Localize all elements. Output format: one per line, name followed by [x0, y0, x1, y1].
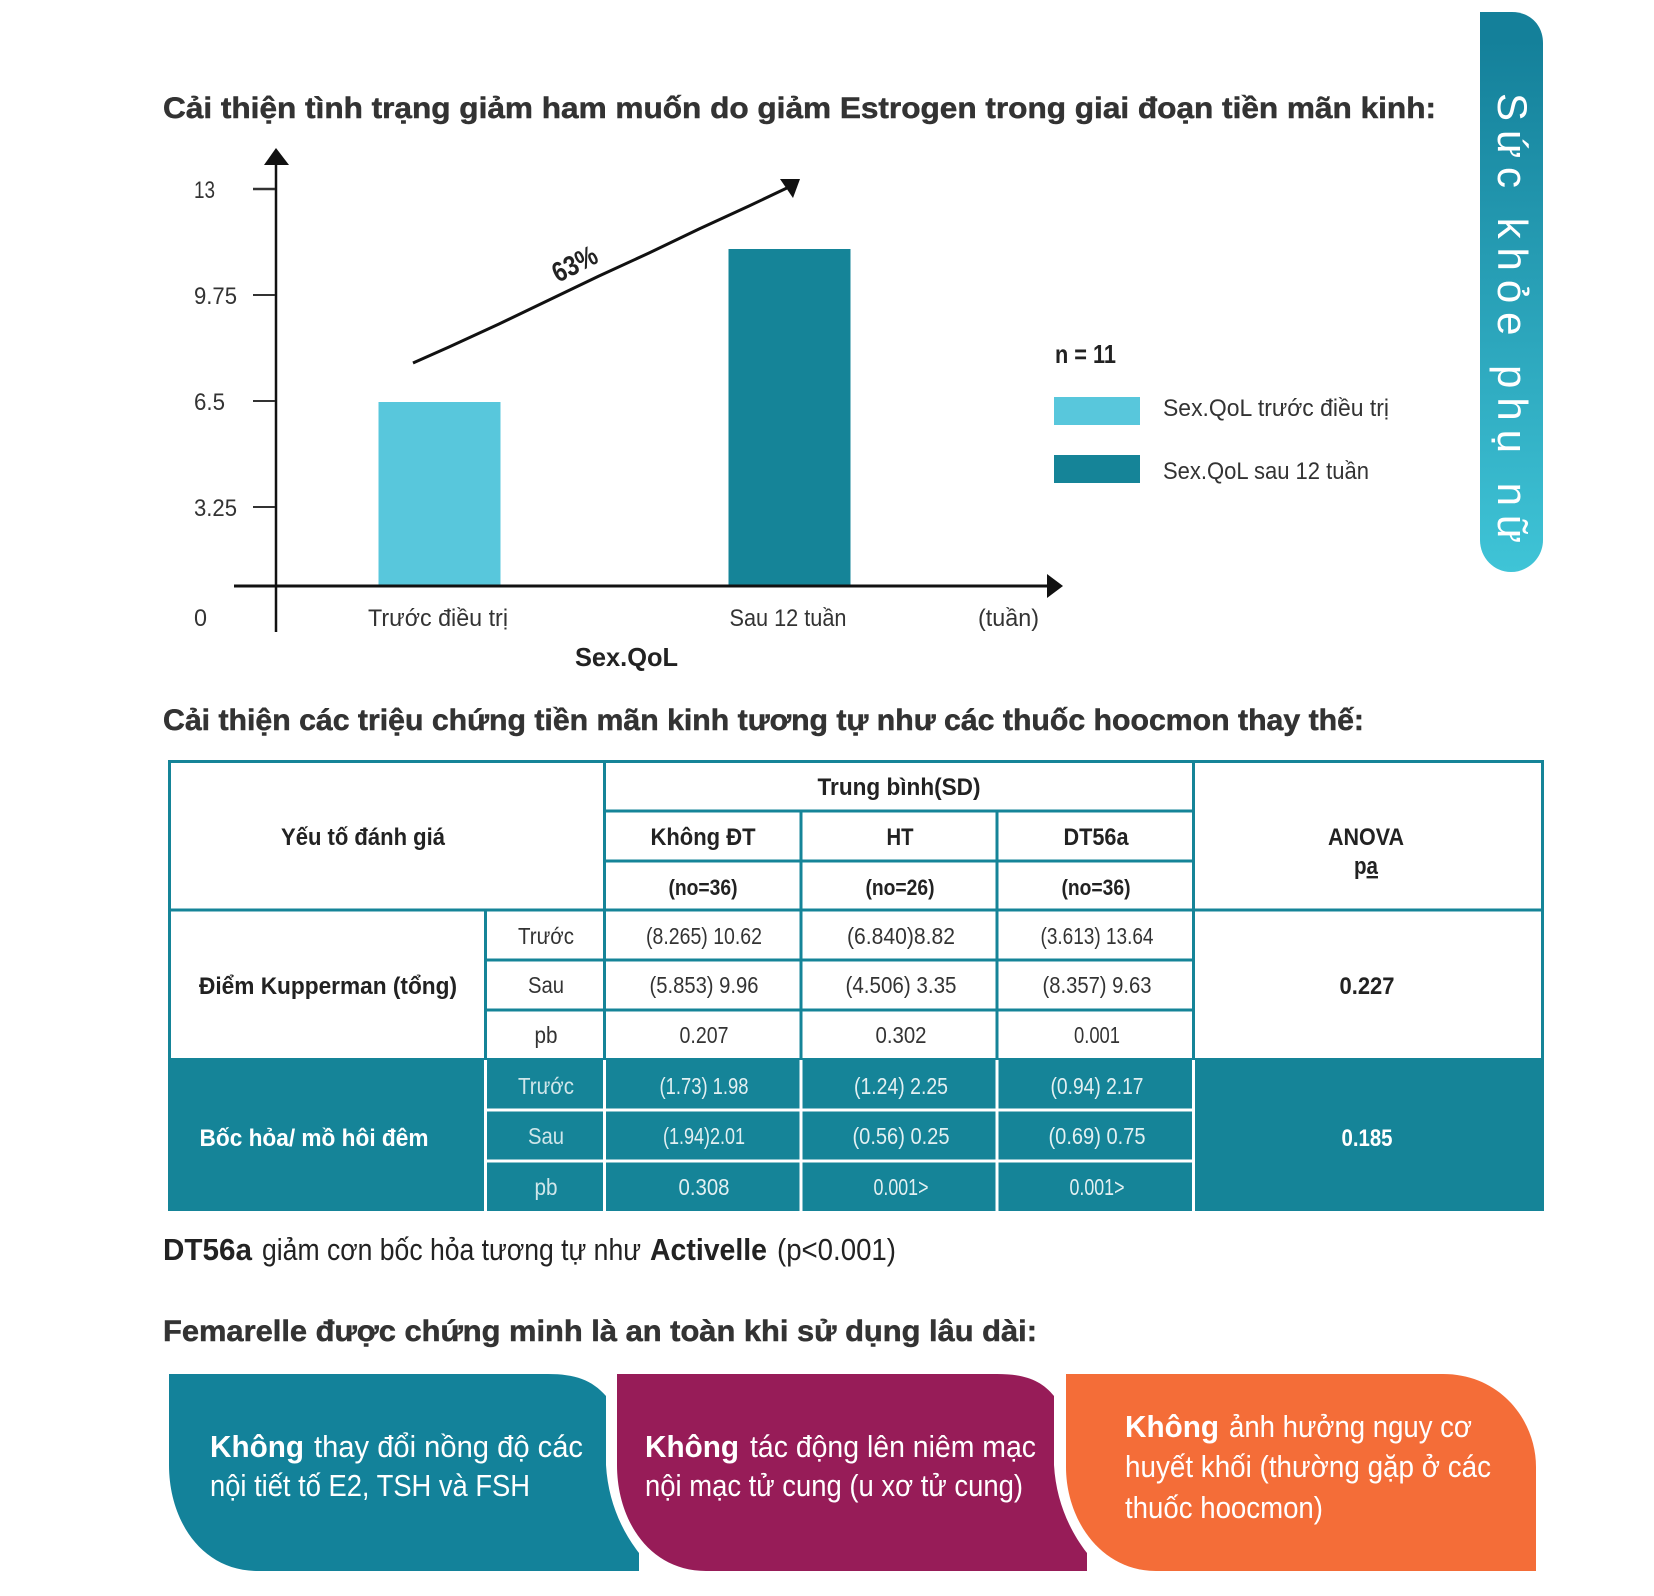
card: hormones: Không	[210, 1429, 304, 1464]
y axis: 6.5	[194, 389, 225, 416]
table rows: Kupperman: 0.001	[1074, 1022, 1120, 1048]
table rows: hot flushes: (0.56) 0.25	[852, 1123, 950, 1149]
trend arrow: 63%: 63%	[547, 239, 603, 288]
table rows: hot flushes: (1.24) 2.25	[854, 1073, 948, 1099]
table rows: hot flushes: (1.94)2.01	[663, 1123, 745, 1149]
legend: n = 11	[1055, 339, 1116, 369]
note: DT56a vs Activelle: (p<0.001)	[777, 1232, 896, 1267]
table header: (no=26)	[866, 875, 934, 900]
table rows: Kupperman: Trước	[518, 923, 574, 949]
note: DT56a vs Activelle: DT56a	[163, 1232, 253, 1267]
x axis: Trước điều trị	[368, 605, 508, 632]
table rows: Kupperman	[199, 923, 1394, 1048]
table rows: Kupperman: 0.207	[680, 1022, 728, 1048]
card: endometrium	[617, 1374, 1087, 1571]
table header: Trung bình(SD)	[818, 774, 980, 801]
bar: after 12 weeks	[728, 249, 850, 586]
card: hormones: nội tiết tố E2, TSH và FSH	[210, 1468, 530, 1503]
legend	[1054, 339, 1389, 485]
sidebar tab: Sức khỏe phụ nữ	[1480, 12, 1543, 572]
table rows: hot flushes: (0.94) 2.17	[1050, 1073, 1144, 1099]
y axis: 3.25	[194, 495, 237, 522]
table rows: Kupperman: (6.840)8.82	[847, 923, 955, 949]
card: thrombosis	[1066, 1374, 1536, 1571]
table header: pa	[1354, 853, 1379, 880]
y axis: 9.75	[194, 283, 237, 310]
card: hormones: thay đổi nồng độ các	[314, 1429, 583, 1464]
table rows: hot flushes: 0.001>	[874, 1174, 928, 1200]
table header: (no=36)	[1062, 875, 1130, 900]
card: thrombosis: Không	[1125, 1409, 1219, 1444]
x axis	[234, 574, 1063, 632]
note: DT56a vs Activelle: giảm cơn bốc hỏa tương tự như	[262, 1232, 641, 1267]
card: hormones	[169, 1374, 639, 1571]
sidebar tab: Sức khỏe phụ nữ: Sức khỏe phụ nữ	[1489, 93, 1536, 543]
table header: DT56a	[1064, 824, 1129, 851]
table header: ANOVA	[1328, 824, 1404, 851]
table rows: hot flushes: 0.001>	[1070, 1174, 1124, 1200]
table rows: hot flushes: 0.185	[1342, 1125, 1392, 1152]
table rows: Kupperman: Sau	[528, 972, 564, 998]
table rows: Kupperman: (8.357) 9.63	[1042, 972, 1152, 998]
table rows: Kupperman: (4.506) 3.35	[846, 972, 956, 998]
table header: Không ĐT	[650, 824, 756, 851]
y axis	[194, 148, 289, 632]
table rows: Kupperman: Điểm Kupperman (tổng)	[199, 973, 457, 1000]
y axis: 13	[194, 177, 215, 204]
note: DT56a vs Activelle	[163, 1232, 896, 1267]
bar: before treatment	[378, 402, 500, 586]
y axis: 0	[194, 605, 207, 632]
table rows: hot flushes: (0.69) 0.75	[1048, 1123, 1146, 1149]
table rows: hot flushes: pb	[534, 1174, 558, 1200]
card: thrombosis: huyết khối (thường gặp ở các	[1125, 1449, 1491, 1484]
table rows: hot flushes	[200, 1073, 1392, 1200]
chart title: Sex.QoL	[575, 642, 678, 672]
card: endometrium: nội mạc tử cung (u xơ tử cung)	[645, 1468, 1023, 1503]
table rows: hot flushes: Trước	[518, 1073, 574, 1099]
table: Kupperman and hot flush scores	[168, 761, 1544, 1211]
x axis: (tuần)	[978, 605, 1039, 632]
table rows: Kupperman: (3.613) 13.64	[1040, 923, 1154, 949]
note: DT56a vs Activelle: Activelle	[650, 1232, 767, 1267]
table rows: hot flushes: (1.73) 1.98	[660, 1073, 748, 1099]
table rows: hot flushes: Bốc hỏa/ mồ hôi đêm	[200, 1125, 428, 1152]
table rows: Kupperman: pb	[534, 1022, 558, 1048]
table rows: Kupperman: 0.302	[876, 1022, 926, 1048]
legend: Sex.QoL sau 12 tuần	[1163, 458, 1369, 485]
card: thrombosis: ảnh hưởng nguy cơ	[1229, 1409, 1472, 1444]
table rows: Kupperman: 0.227	[1340, 973, 1394, 1000]
card: endometrium: tác động lên niêm mạc	[750, 1429, 1036, 1464]
heading: menopause symptoms: Cải thiện các triệu chứng tiền mãn kinh tương tự như các thuốc hoocmon thay thế:	[163, 704, 1364, 737]
trend arrow: 63%	[413, 179, 800, 363]
bar chart: Sex.QoL	[194, 148, 1063, 672]
heading: sexual quality of life: Cải thiện tình trạng giảm ham muốn do giảm Estrogen trong giai đoạn tiền mãn kinh:	[163, 92, 1436, 125]
heading: long-term safety: Femarelle được chứng minh là an toàn khi sử dụng lâu dài:	[163, 1315, 1037, 1348]
card: thrombosis: thuốc hoocmon)	[1125, 1490, 1323, 1525]
table header	[281, 774, 1404, 900]
card: endometrium: Không	[645, 1429, 739, 1464]
x axis: Sau 12 tuần	[730, 605, 846, 632]
table rows: Kupperman: (5.853) 9.96	[650, 972, 758, 998]
legend: Sex.QoL trước điều trị	[1163, 395, 1389, 422]
table header: HT	[886, 824, 914, 851]
table header: (no=36)	[668, 875, 738, 900]
table rows: hot flushes: Sau	[528, 1123, 564, 1149]
table header: Yếu tố đánh giá	[281, 824, 446, 851]
table rows: Kupperman: (8.265) 10.62	[646, 923, 762, 949]
table rows: hot flushes: 0.308	[678, 1174, 730, 1200]
